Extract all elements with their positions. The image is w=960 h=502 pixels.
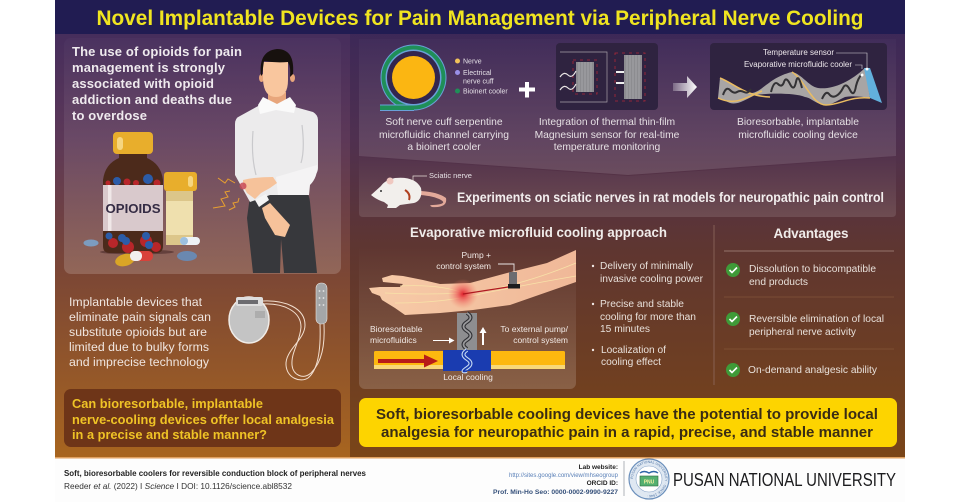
list: cooling approach benefits: invasive cooling power [600, 274, 704, 285]
icon: nerve with local cooling [374, 313, 565, 371]
label: pump and control [436, 250, 491, 271]
icon: plus [519, 82, 535, 98]
lab contact [493, 464, 618, 496]
icon: check [726, 263, 740, 277]
caption: sensor integration: Integration of thermal thin-film [539, 117, 675, 128]
poster background: left column [55, 0, 351, 458]
text: opioid statement: management is strongly [72, 60, 226, 75]
list: cooling approach benefits [592, 261, 704, 368]
caption: nerve cuff: a bioinert cooler [407, 142, 481, 153]
icon: nerve cuff cross-section [380, 44, 446, 111]
list: cooling approach benefits: Precise and stable [600, 299, 684, 310]
text: opioid statement: The use of opioids for pain [72, 44, 242, 59]
caption: sensor integration: temperature monitoring [554, 142, 660, 153]
panel: microfluidic cooling device: Evaporative microfluidic cooler [744, 60, 852, 69]
lab contact: Prof. Min-Ho Seo: 0000-0002-9990-9227 [493, 489, 618, 496]
callout: research question: in a precise and stable manner? [72, 427, 267, 442]
text: opioid statement: addiction and deaths due [72, 92, 232, 107]
list: advantages: Dissolution to biocompatible [749, 264, 876, 275]
caption: sensor integration: Magnesium sensor for real-time [535, 130, 680, 141]
citation: Soft, bioresorbable coolers for reversible conduction block of peripheral nerves [64, 468, 366, 478]
caption: cooling device: microfluidic cooling device [738, 130, 858, 141]
text: implantable devices limitation: Implantable devices that [69, 295, 203, 309]
caption: cooling device [737, 117, 859, 141]
panel: opioids [64, 38, 341, 274]
icon: rat [371, 176, 446, 208]
label: pump and control: Pump + [461, 250, 491, 260]
arrow: to pump label [498, 264, 514, 272]
icon: pain zigzags [213, 178, 239, 210]
caption: nerve cuff: Soft nerve cuff serpentine [385, 117, 503, 128]
list: cooling approach benefits: Delivery of minimally [600, 261, 693, 272]
label: local cooling: Local cooling [443, 372, 493, 382]
label: to external pump [500, 324, 569, 345]
icon: arrow [673, 76, 697, 98]
text: implantable devices limitation: eliminate pain signals can [69, 310, 211, 324]
icon: man holding wrist [235, 49, 318, 273]
list: advantages: end products [749, 277, 808, 288]
panel: rat experiments [359, 157, 896, 217]
arrow: microfluidics pointer [433, 338, 454, 344]
caption: nerve cuff [379, 117, 509, 153]
bottle label: OPIOIDS [106, 202, 160, 216]
caption: nerve cuff: microfluidic channel carrying [379, 130, 509, 141]
callout: conclusion [359, 398, 897, 447]
list: cooling approach benefits: Localization of [601, 345, 666, 356]
panel: device design [359, 39, 896, 175]
list: advantages [726, 263, 884, 377]
lab contact: ORCID ID: [587, 480, 618, 487]
list: advantages: peripheral nerve activity [749, 327, 856, 338]
arrow: upward flow [480, 327, 486, 345]
caption: cooling device: Bioresorbable, implantable [737, 117, 859, 128]
text: implantable devices limitation [69, 295, 211, 369]
heading: advantages: Advantages [774, 226, 848, 241]
label: pump and control: control system [436, 261, 491, 271]
text: implantable devices limitation: and imprecise technology [69, 355, 210, 369]
poster background: right column [350, 0, 905, 458]
panel: microfluidic cooling device: Temperature sensor [763, 48, 834, 57]
text: opioid statement: associated with opioid [72, 76, 214, 91]
legend: cuff layers: nerve cuff [463, 78, 494, 86]
icon: implantable pulse generator with leads [229, 283, 327, 380]
list: cooling approach benefits: cooling effect [601, 357, 661, 368]
caption: sensor integration [535, 117, 680, 153]
lab contact: http://sites.google.com/view/mhseogroup [509, 472, 618, 479]
list: cooling approach benefits: cooling for more than [600, 312, 696, 323]
logo: university seal: PUSAN NATIONAL UNIVERSITY · SINCE 1946 · [630, 460, 668, 498]
label: to external pump: control system [513, 335, 568, 345]
legend: cuff layers: Electrical [463, 70, 492, 77]
callout: research question: Can bioresorbable, implantable [72, 396, 263, 411]
list: advantages: On-demand analgesic ability [748, 365, 877, 376]
label: bioresorbable microfluidics [370, 324, 423, 345]
callout: conclusion: Soft, bioresorbable cooling devices have the potential to provide local [376, 406, 878, 423]
panel: cooling approach diagram [359, 245, 576, 389]
label: to external pump: To external pump/ [500, 324, 569, 334]
callout: research question: nerve-cooling devices offer local analgesia [72, 412, 335, 427]
text: implantable devices limitation: substitute opioids but are [69, 325, 207, 339]
legend: cuff layers: Bioinert cooler [463, 88, 508, 96]
label: bioresorbable microfluidics: Bioresorbable [370, 324, 423, 334]
callout: conclusion: analgesia for neuropathic pain in a rapid, precise, and stable manner [381, 424, 873, 441]
label: sciatic nerve: Sciatic nerve [429, 171, 472, 180]
heading: rat experiments: Experiments on sciatic nerves in rat models for neuropathic pain control [457, 190, 884, 205]
lab contact: Lab website: [579, 464, 618, 471]
label: bioresorbable microfluidics: microfluidics [370, 335, 417, 345]
panel: thin-film sensor diagram [556, 43, 658, 110]
icon: small pill bottle [164, 172, 197, 245]
logo: university seal: PNU [644, 480, 655, 486]
icon: opioids bottle [100, 132, 174, 254]
legend: cuff layers [455, 58, 508, 96]
icon: check [726, 312, 740, 326]
icon: loose pills [84, 237, 200, 268]
citation [64, 468, 366, 491]
panel: microfluidic cooling device [710, 43, 887, 110]
title: Novel Implantable Devices for Pain Management via Peripheral Nerve Cooling [96, 7, 864, 30]
callout: research question [64, 389, 341, 447]
list: cooling approach benefits: 15 minutes [600, 324, 650, 335]
legend: cuff layers: Nerve [463, 58, 482, 66]
text: implantable devices limitation: limited due to bulky forms [69, 340, 209, 354]
footer [55, 457, 905, 500]
text: opioid statement: to overdose [72, 108, 147, 123]
list: advantages: Reversible elimination of local [749, 314, 884, 325]
text: opioid statement [72, 44, 242, 123]
heading: cooling approach: Evaporative microfluid cooling approach [410, 225, 667, 240]
icon: check [726, 363, 740, 377]
icon: forearm with pump [369, 250, 576, 315]
title band [55, 0, 905, 34]
citation: Reeder et al. (2022) I Science I DOI: 10.1126/science.abl8532 [64, 481, 292, 491]
wordmark: PUSAN NATIONAL UNIVERSITY [673, 470, 896, 490]
